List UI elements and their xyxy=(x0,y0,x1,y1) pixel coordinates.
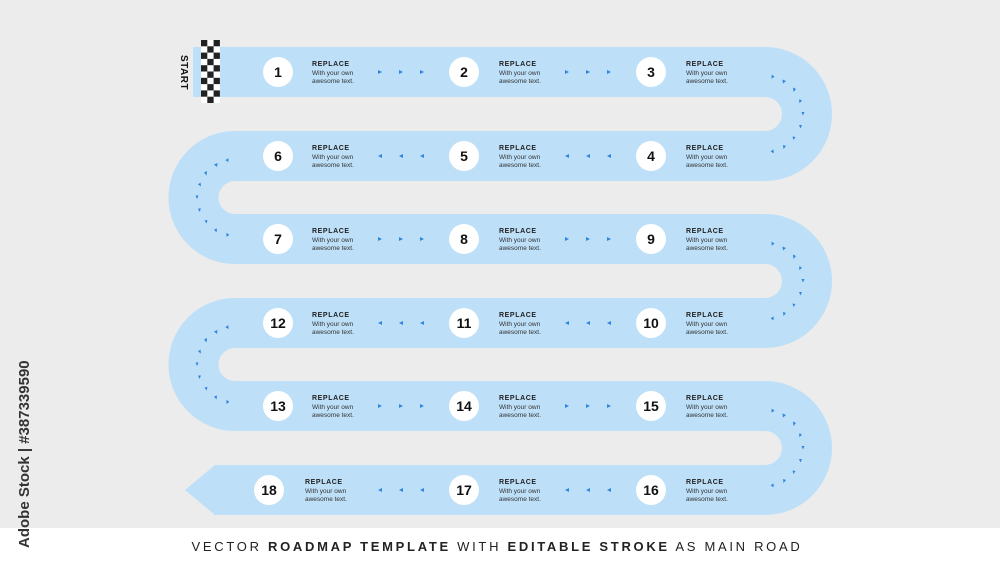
text blocks: REPLACE xyxy=(686,479,724,486)
straight direction arrows xyxy=(378,70,611,492)
text blocks: With your own xyxy=(312,237,354,244)
text blocks: REPLACE xyxy=(499,479,537,486)
curve direction arrows xyxy=(196,75,804,487)
milestones: 4 xyxy=(647,148,655,164)
text blocks: With your own xyxy=(686,488,728,495)
caption bar xyxy=(0,528,1000,563)
text blocks: With your own xyxy=(686,321,728,328)
text blocks: With your own xyxy=(499,488,541,495)
text blocks: With your own xyxy=(499,70,541,77)
text blocks: awesome text. xyxy=(499,78,541,85)
milestones: 6 xyxy=(274,148,282,164)
milestones: 2 xyxy=(460,64,468,80)
text blocks: REPLACE xyxy=(312,395,350,402)
text blocks: awesome text. xyxy=(312,245,354,252)
text blocks: REPLACE xyxy=(312,228,350,235)
text blocks: With your own xyxy=(686,237,728,244)
text blocks: With your own xyxy=(499,154,541,161)
text blocks: With your own xyxy=(312,70,354,77)
text blocks: With your own xyxy=(499,404,541,411)
milestones: 1 xyxy=(274,64,282,80)
caption bar: VECTOR ROADMAP TEMPLATE WITH EDITABLE STROKE AS MAIN ROAD xyxy=(192,539,802,554)
text blocks: REPLACE xyxy=(305,479,343,486)
text blocks: REPLACE xyxy=(499,145,537,152)
road xyxy=(185,72,807,515)
milestones: 14 xyxy=(456,398,472,414)
milestones: 16 xyxy=(643,482,659,498)
text blocks: REPLACE xyxy=(499,228,537,235)
text blocks: awesome text. xyxy=(499,245,541,252)
text blocks: awesome text. xyxy=(686,78,728,85)
milestones: 17 xyxy=(456,482,472,498)
milestones: 18 xyxy=(261,482,277,498)
text blocks: awesome text. xyxy=(686,496,728,503)
text blocks: awesome text. xyxy=(686,162,728,169)
milestones: 11 xyxy=(457,315,472,331)
text blocks: REPLACE xyxy=(499,395,537,402)
text blocks: With your own xyxy=(312,321,354,328)
text blocks: With your own xyxy=(686,154,728,161)
text blocks xyxy=(305,61,728,503)
text blocks: REPLACE xyxy=(686,61,724,68)
milestones: 13 xyxy=(270,398,286,414)
text blocks: REPLACE xyxy=(312,312,350,319)
text blocks: With your own xyxy=(305,488,347,495)
text blocks: With your own xyxy=(686,404,728,411)
text blocks: REPLACE xyxy=(312,61,350,68)
text blocks: awesome text. xyxy=(499,496,541,503)
milestones: 8 xyxy=(460,231,468,247)
text blocks: awesome text. xyxy=(312,329,354,336)
milestones: 10 xyxy=(643,315,659,331)
text blocks: awesome text. xyxy=(686,245,728,252)
text blocks: awesome text. xyxy=(305,496,347,503)
text blocks: REPLACE xyxy=(499,61,537,68)
text blocks: awesome text. xyxy=(312,412,354,419)
text blocks: REPLACE xyxy=(686,312,724,319)
text blocks: awesome text. xyxy=(686,412,728,419)
text blocks: awesome text. xyxy=(686,329,728,336)
text blocks: awesome text. xyxy=(499,162,541,169)
text blocks: With your own xyxy=(312,404,354,411)
text blocks: REPLACE xyxy=(686,228,724,235)
text blocks: With your own xyxy=(312,154,354,161)
text blocks: REPLACE xyxy=(686,145,724,152)
milestones: 5 xyxy=(460,148,468,164)
text blocks: awesome text. xyxy=(499,412,541,419)
text blocks: awesome text. xyxy=(499,329,541,336)
text blocks: REPLACE xyxy=(312,145,350,152)
text blocks: REPLACE xyxy=(686,395,724,402)
watermark id: Adobe Stock | #387339590 xyxy=(16,360,33,548)
text blocks: REPLACE xyxy=(499,312,537,319)
text blocks: With your own xyxy=(499,237,541,244)
milestones: 9 xyxy=(647,231,655,247)
milestones: 3 xyxy=(647,64,655,80)
text blocks: awesome text. xyxy=(312,162,354,169)
text blocks: awesome text. xyxy=(312,78,354,85)
milestones: 12 xyxy=(270,315,286,331)
start flag xyxy=(178,40,220,103)
milestones: 7 xyxy=(274,231,282,247)
text blocks: With your own xyxy=(499,321,541,328)
start flag: START xyxy=(178,55,189,90)
milestones xyxy=(254,57,666,505)
text blocks: With your own xyxy=(686,70,728,77)
milestones: 15 xyxy=(643,398,659,414)
